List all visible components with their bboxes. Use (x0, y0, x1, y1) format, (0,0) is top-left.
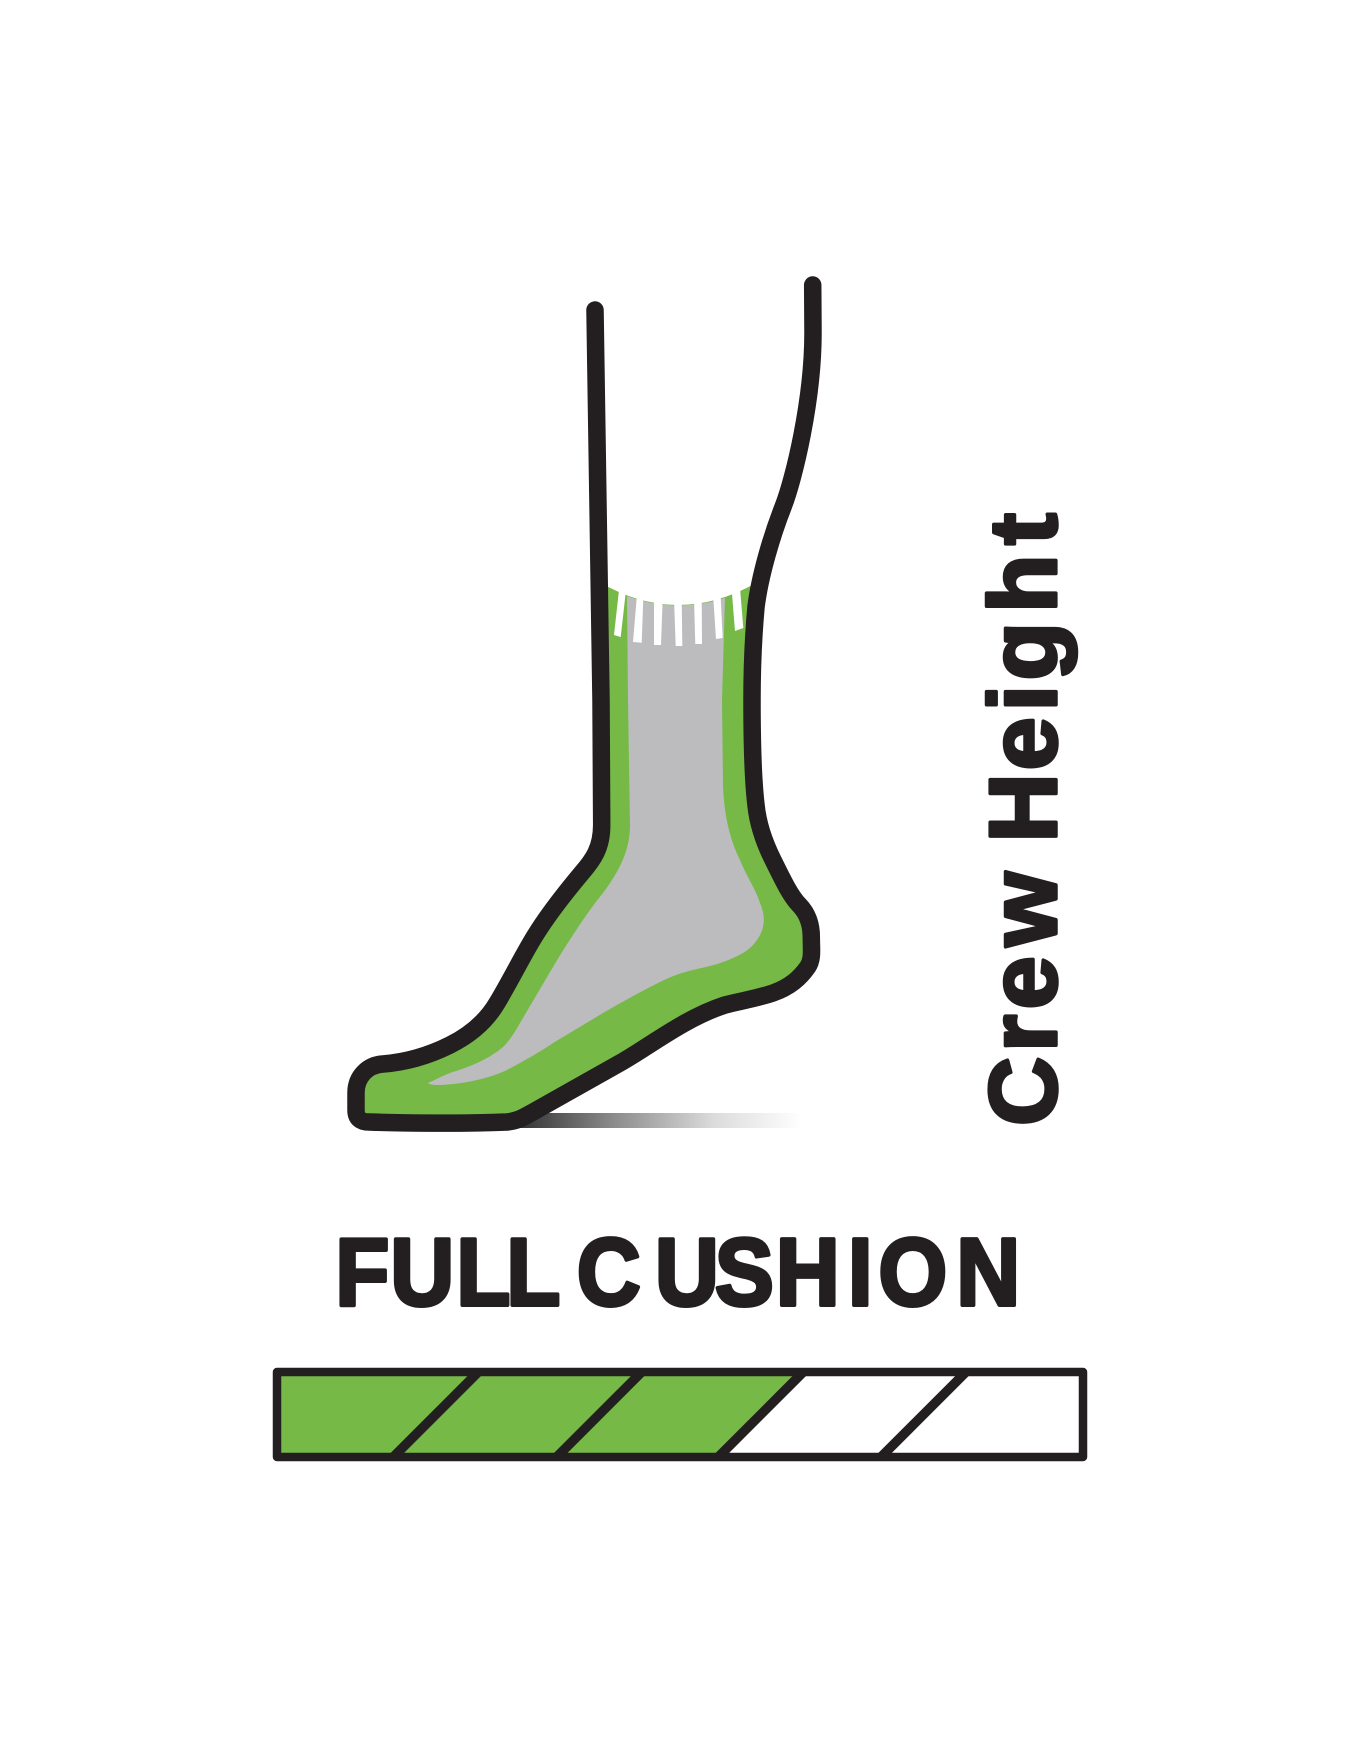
green sock shell (356, 583, 812, 1123)
icon: sock on foot (356, 285, 813, 1128)
black leg and foot outline (356, 285, 813, 1123)
ground shadow (510, 1113, 802, 1128)
label: crew height: Crew Height (970, 513, 1077, 1126)
divider strokes (393, 1372, 966, 1457)
grey foot lining (428, 596, 764, 1085)
heading: full cushion: FULL CUSHION (335, 1219, 1020, 1326)
cushion level bar: 3 of 5 (277, 1372, 1083, 1457)
filled segments (277, 1372, 805, 1457)
bar frame (277, 1372, 1083, 1457)
white ribbing notches (614, 588, 743, 646)
